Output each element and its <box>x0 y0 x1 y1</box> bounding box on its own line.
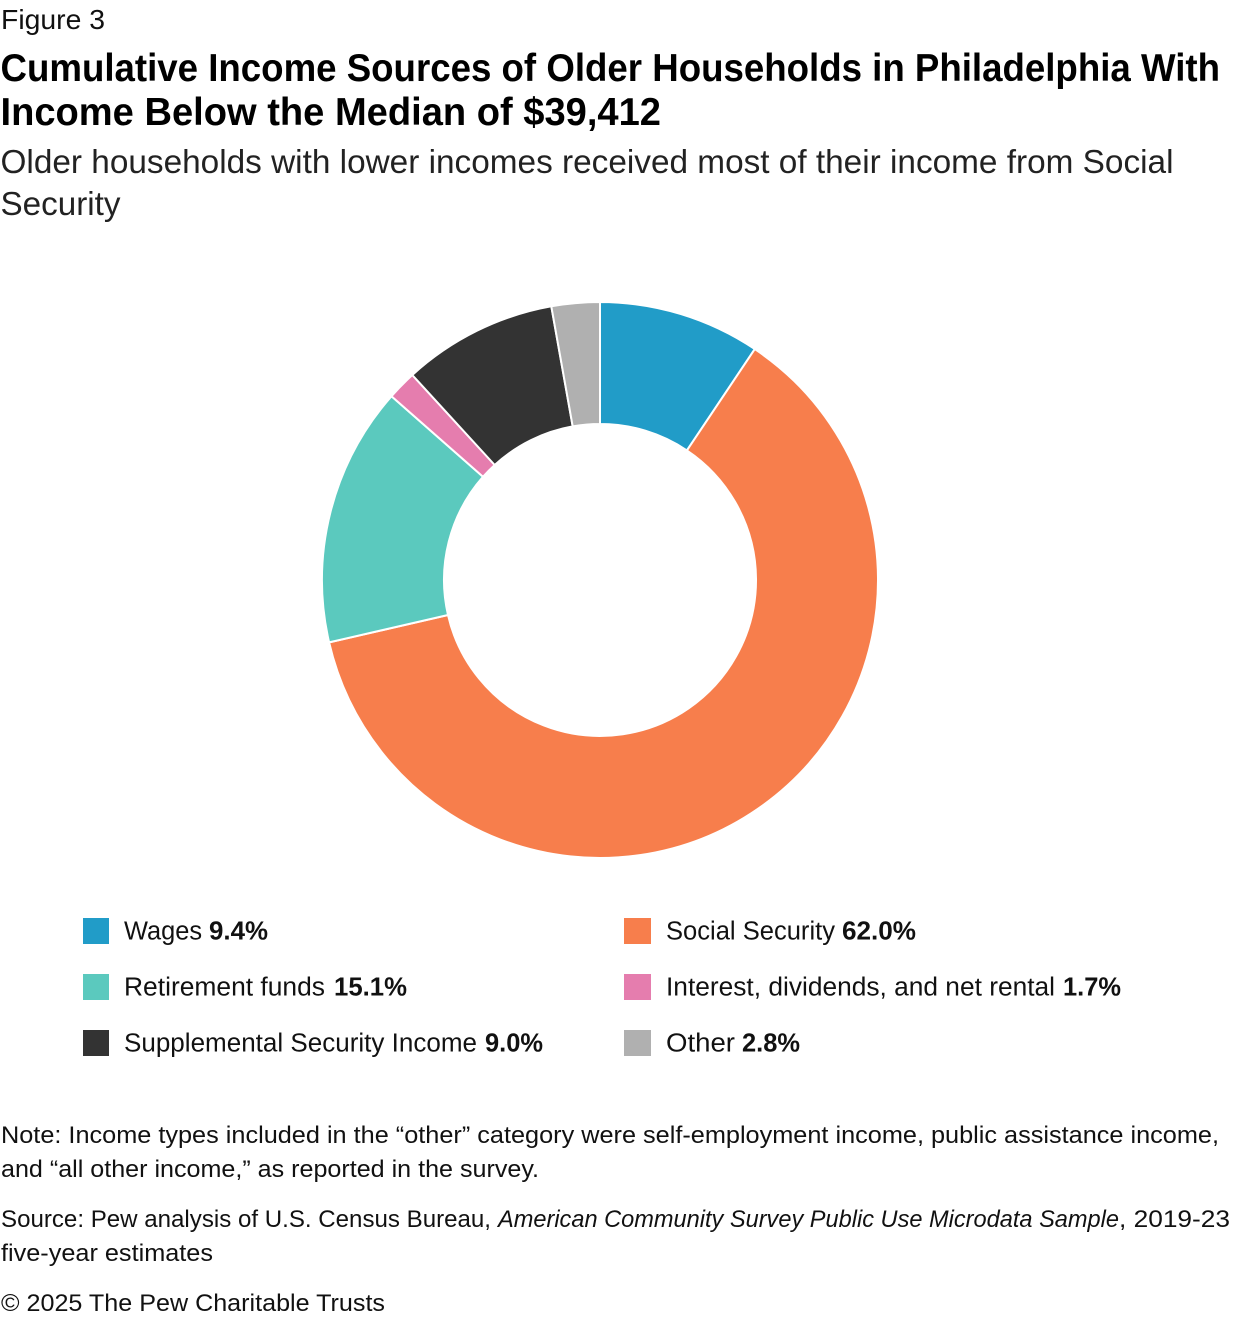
source <box>1 1206 1230 1267</box>
segment: wages 9.4% <box>600 302 755 450</box>
source: five-year estimates <box>1 1240 213 1267</box>
legend item: wages: Wages <box>124 918 202 946</box>
legend item: interest, dividends, and net rental: 1.7% <box>1063 974 1121 1002</box>
subtitle <box>0 143 1174 222</box>
legend <box>83 918 1121 1058</box>
legend item: other <box>624 1030 800 1058</box>
segment: social security 62.0% <box>329 349 878 858</box>
legend item: retirement funds: Retirement funds <box>124 974 325 1002</box>
subtitle: Older households with lower incomes received most of their income from Social <box>0 143 1174 180</box>
note <box>1 1122 1219 1183</box>
legend item: interest, dividends, and net rental: Interest, dividends, and net rental <box>666 974 1055 1002</box>
note: Note: Income types included in the “other” category were self-employment income, public assistance income, <box>1 1122 1219 1149</box>
legend item: social security: 62.0% <box>842 918 916 946</box>
segment: other 2.8% <box>551 302 600 426</box>
segment: supplemental security income 9.0% <box>412 306 573 465</box>
legend item: other: 2.8% <box>742 1030 800 1058</box>
legend item: retirement funds <box>83 974 407 1002</box>
donut chart <box>322 302 878 858</box>
legend item: wages: 9.4% <box>209 918 268 946</box>
source: Source: Pew analysis of U.S. Census Bureau, <box>1 1206 491 1233</box>
title <box>0 47 1220 134</box>
figure label: Figure 3 <box>1 4 105 35</box>
segment: interest, dividends, and net rental 1.7% <box>392 375 495 477</box>
segment: retirement funds 15.1% <box>322 396 483 642</box>
legend item: supplemental security income: 9.0% <box>485 1030 543 1058</box>
source: American Community Survey Public Use Microdata Sample <box>496 1206 1119 1233</box>
legend item: supplemental security income: Supplemental Security Income <box>124 1030 477 1058</box>
legend item: retirement funds: 15.1% <box>334 974 407 1002</box>
note: and “all other income,” as reported in the survey. <box>1 1156 539 1183</box>
legend item: social security: Social Security <box>666 918 835 946</box>
subtitle: Security <box>0 185 121 222</box>
legend item: wages <box>83 918 268 946</box>
source: , 2019-23 <box>1119 1206 1230 1233</box>
legend item: other: Other <box>666 1030 736 1058</box>
copyright: © 2025 The Pew Charitable Trusts <box>1 1290 385 1317</box>
title: Income Below the Median of $39,412 <box>0 91 661 134</box>
legend item: social security <box>624 918 916 946</box>
